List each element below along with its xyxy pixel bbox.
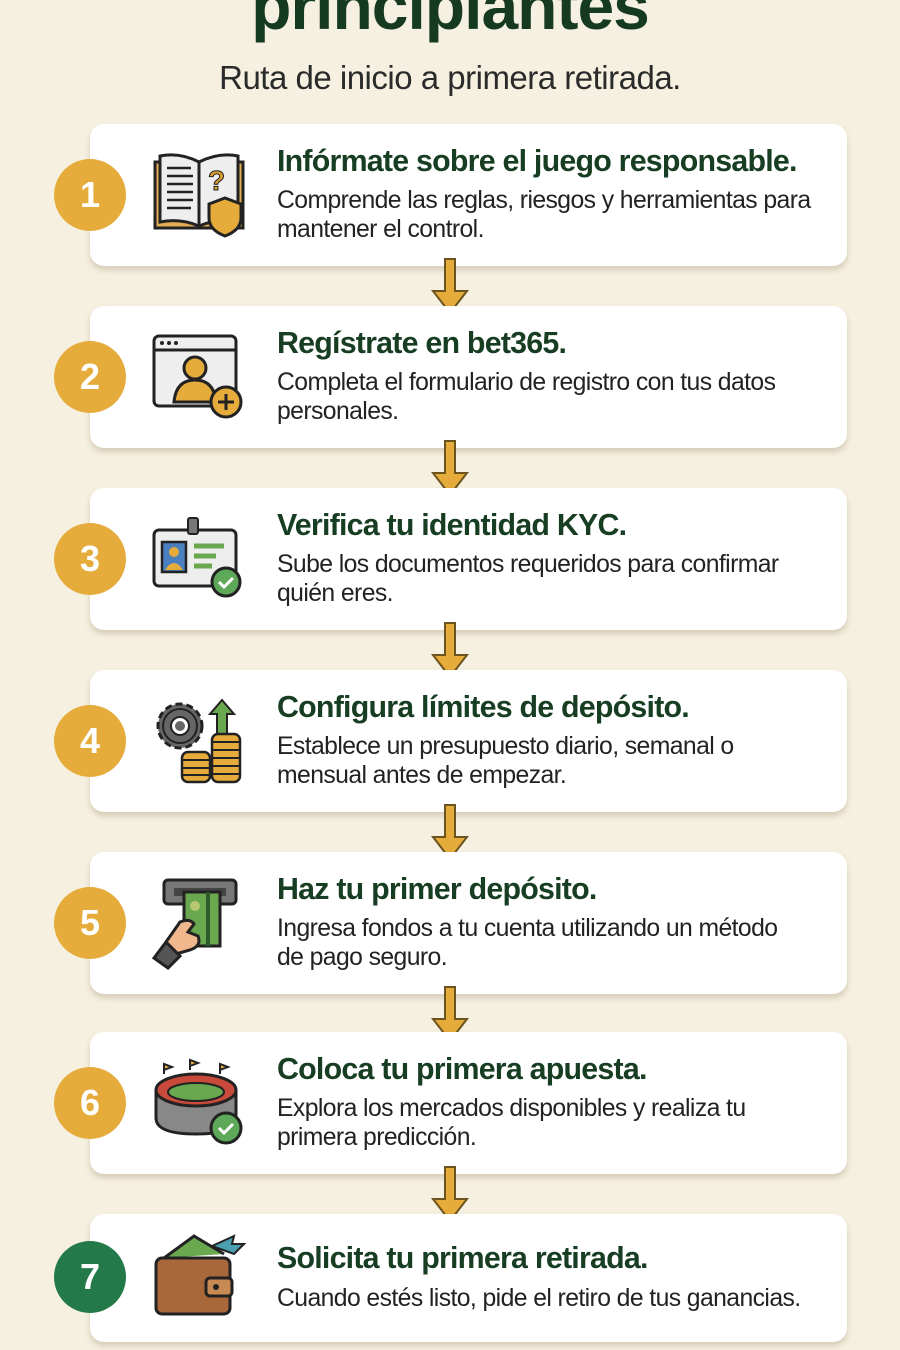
icon: book with shield: ? [208, 165, 225, 196]
arrow [431, 622, 469, 670]
number 2 [54, 341, 126, 413]
description: Explora los mercados disponibles y realiza tu [277, 1094, 746, 1122]
subtitle: Ruta de inicio a primera retirada. [219, 59, 681, 96]
heading: Haz tu primer depósito. [277, 871, 597, 906]
number 1 [54, 159, 126, 231]
heading: Coloca tu primera apuesta. [277, 1051, 647, 1086]
number 4: 4 [80, 720, 100, 761]
description: Comprende las reglas, riesgos y herramientas para [277, 186, 811, 214]
heading: Solicita tu primera retirada. [277, 1240, 648, 1275]
description [277, 914, 777, 971]
description: mensual antes de empezar. [277, 761, 566, 789]
step 7 [90, 1214, 847, 1342]
step 4 [90, 670, 847, 812]
number 3 [54, 523, 126, 595]
number 1: 1 [80, 174, 100, 215]
arrow [431, 258, 469, 306]
description [277, 186, 812, 243]
description: quién eres. [277, 579, 393, 607]
heading: Verifica tu identidad KYC. [277, 507, 626, 542]
description: Completa el formulario de registro con tus datos [277, 368, 775, 396]
step 6 [90, 1032, 847, 1174]
icon: hand inserting cash [152, 878, 238, 970]
number 7 [54, 1241, 126, 1313]
description: Establece un presupuesto diario, semanal o [277, 732, 734, 760]
number 2: 2 [80, 356, 100, 397]
description: Sube los documentos requeridos para confirmar [277, 550, 779, 578]
description: mantener el control. [277, 215, 484, 243]
description: Cuando estés listo, pide el retiro de tus ganancias. [277, 1284, 801, 1312]
number 6: 6 [80, 1082, 100, 1123]
icon: register user [152, 334, 242, 418]
arrow [431, 804, 469, 852]
description: Ingresa fondos a tu cuenta utilizando un método [277, 914, 777, 942]
arrow [431, 986, 469, 1032]
description [277, 368, 776, 425]
description: personales. [277, 397, 398, 425]
heading: Infórmate sobre el juego responsable. [277, 143, 797, 178]
step 5 [90, 852, 847, 994]
arrow [431, 440, 469, 488]
description [277, 1094, 746, 1151]
step 1 [90, 124, 847, 266]
icon: id card check [152, 517, 242, 598]
number 6 [54, 1067, 126, 1139]
icon: gear and coins [156, 698, 242, 784]
step 3 [90, 488, 847, 630]
description [277, 550, 779, 607]
number 7: 7 [80, 1256, 100, 1297]
description [277, 732, 734, 789]
icon: book with shield [154, 153, 244, 238]
description: primera predicción. [277, 1123, 476, 1151]
number 5: 5 [80, 902, 100, 943]
heading: Regístrate en bet365. [277, 325, 566, 360]
number 4 [54, 705, 126, 777]
icon: stadium check [154, 1058, 242, 1144]
step 2 [90, 306, 847, 448]
heading: Configura límites de depósito. [277, 689, 689, 724]
icon: wallet with cash [154, 1234, 246, 1316]
number 3: 3 [80, 538, 100, 579]
number 5 [54, 887, 126, 959]
arrow [431, 1166, 469, 1214]
description: de pago seguro. [277, 943, 447, 971]
